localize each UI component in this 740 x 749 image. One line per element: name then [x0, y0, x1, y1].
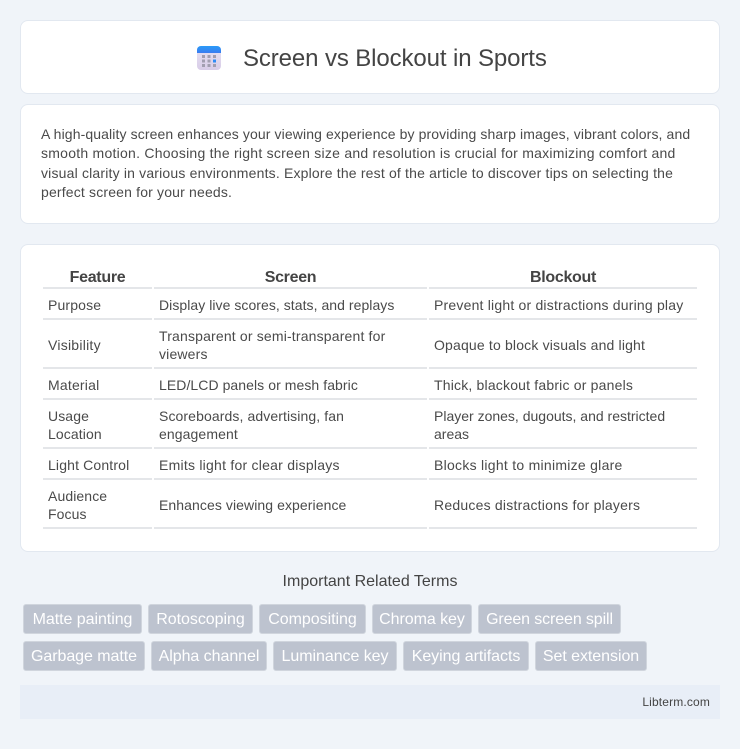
row: Purpose: Display live scores, stats, and replays: [159, 297, 394, 313]
related terms tags: [23, 604, 647, 671]
tag: Matte painting: Matte painting: [33, 611, 132, 628]
tag: Matte painting: [23, 604, 142, 634]
table header: Screen: Screen: [265, 269, 316, 286]
tag: Luminance key: [273, 641, 397, 671]
row: Visibility: Opaque to block visuals and light: [434, 337, 645, 353]
row: Audience Focus: Reduces distractions for players: [434, 497, 640, 513]
tag: Green screen spill: [478, 604, 621, 634]
row: Material: Thick, blackout fabric or panels: [434, 377, 633, 393]
intro text: visual clarity in various environments. Explore the rest of the article to discover tips on selecting the: [41, 165, 673, 181]
row: Purpose: Purpose: [48, 297, 101, 313]
tag: Compositing: [259, 604, 366, 634]
comparison table panel: [20, 244, 720, 552]
intro panel: [20, 104, 720, 224]
row: Light Control: [48, 457, 623, 473]
row: Audience Focus: Focus: [48, 506, 87, 522]
row: Purpose: [48, 297, 684, 313]
intro text: perfect screen for your needs.: [41, 184, 232, 200]
row: Visibility: [48, 328, 645, 362]
row: Light Control: Light Control: [48, 457, 129, 473]
footer bar: [20, 685, 720, 719]
comparison table: [43, 269, 697, 529]
tag: Green screen spill: Green screen spill: [486, 611, 613, 628]
row: Usage Location: Player zones, dugouts, and restricted: [434, 408, 665, 424]
tag: Chroma key: Chroma key: [379, 611, 465, 628]
row: Material: [48, 377, 633, 393]
tag: Alpha channel: [151, 641, 267, 671]
row: Visibility: Visibility: [48, 337, 101, 353]
tag: Luminance key: Luminance key: [282, 648, 388, 665]
related terms heading: Important Related Terms: [283, 573, 457, 590]
row: Purpose: Prevent light or distractions during play: [434, 297, 683, 313]
tag: Rotoscoping: Rotoscoping: [156, 611, 245, 628]
table header: Feature: Feature: [70, 269, 125, 286]
intro text: A high-quality screen enhances your viewing experience by providing sharp images, vibrant colors, and: [41, 126, 690, 142]
row: Visibility: Transparent or semi-transparent for: [159, 328, 385, 344]
row: Material: LED/LCD panels or mesh fabric: [159, 377, 358, 393]
tag: Set extension: [535, 641, 647, 671]
tag: Garbage matte: [23, 641, 145, 671]
tag: Keying artifacts: [403, 641, 529, 671]
tag: Compositing: Compositing: [268, 611, 357, 628]
tag: Garbage matte: Garbage matte: [31, 648, 137, 665]
title: Screen vs Blockout in Sports: [243, 45, 547, 72]
row: Light Control: Emits light for clear displays: [159, 457, 340, 473]
tag: Keying artifacts: Keying artifacts: [412, 648, 520, 665]
tag: Chroma key: [372, 604, 472, 634]
row: Material: Material: [48, 377, 99, 393]
footer credit: Libterm.com: [642, 695, 710, 709]
row: Audience Focus: [48, 488, 640, 522]
row: Usage Location: Scoreboards, advertising, fan: [159, 408, 344, 424]
row: Audience Focus: Audience: [48, 488, 107, 504]
row: Usage Location: engagement: [159, 426, 238, 442]
row: Visibility: viewers: [159, 346, 208, 362]
table header: Blockout: Blockout: [530, 269, 596, 286]
row: Usage Location: Location: [48, 426, 102, 442]
intro text: smooth motion. Choosing the right screen size and resolution is crucial for maximizing comfort and: [41, 145, 676, 161]
row: Usage Location: areas: [434, 426, 469, 442]
row: Usage Location: Usage: [48, 408, 89, 424]
tag: Rotoscoping: [148, 604, 253, 634]
icon: calendar: [197, 46, 221, 70]
tag: Alpha channel: Alpha channel: [159, 648, 259, 665]
row: Light Control: Blocks light to minimize glare: [434, 457, 623, 473]
row: Audience Focus: Enhances viewing experience: [159, 497, 346, 513]
tag: Set extension: Set extension: [543, 648, 639, 665]
row: Usage Location: [48, 408, 665, 442]
intro text: [41, 126, 690, 200]
header panel: [20, 20, 720, 94]
